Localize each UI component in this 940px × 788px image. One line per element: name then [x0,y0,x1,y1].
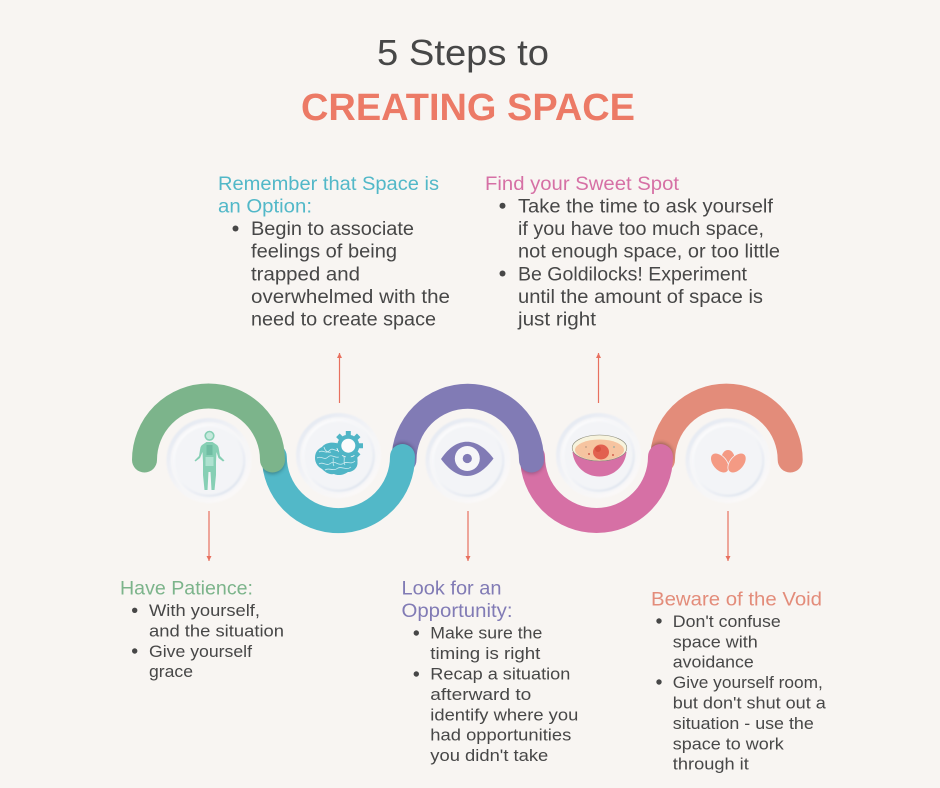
step 4 plate with soup bowl icon [556,413,641,498]
step 5 plate with lotus icon [686,418,770,503]
text block: Beware of the Void: Give yourself room, [673,673,823,692]
text block: Look for an Opportunity: Look for an [402,578,502,599]
text block: Beware of the Void: through it [673,755,749,774]
text block: Have Patience: Give yourself [149,642,252,661]
step 1 plate with body icon [166,418,252,503]
icon: lotus [707,450,750,476]
text block: Find your Sweet Spot: Find your Sweet Spot [485,174,680,195]
text block: Find your Sweet Spot: just right [517,310,597,331]
icon: soup bowl [572,435,627,476]
text block: Have Patience: and the situation [149,622,284,641]
text block: Beware of the Void: space to work [673,734,784,753]
arrow: down to Have Patience [208,511,210,561]
text block: Beware of the Void: situation - use the [673,714,814,733]
text block: Beware of the Void: Beware of the Void [651,589,822,610]
band: pink arc [532,442,673,520]
text block: Find your Sweet Spot: not enough space, or too little [518,242,780,263]
band: salmon arc [662,396,790,460]
wave timeline [144,396,790,521]
text block: Beware of the Void: avoidance [673,653,754,672]
arrow: down to Look for an Opportunity [467,511,469,561]
text block: Remember that Space is an Option: overwhelmed with the [251,287,450,308]
text block: Have Patience [120,578,284,681]
text block: Have Patience: Have Patience: [120,578,253,599]
band: purple arc [404,396,544,474]
text block: Remember that Space is an Option: Remember that Space is [218,174,439,195]
text block: Look for an Opportunity: timing is right [430,644,541,663]
icon: human body [194,432,224,490]
title [301,32,635,129]
text block: Have Patience: grace [149,662,193,681]
text block: Remember that Space is an Option: Begin to associate [251,219,414,240]
text block: Remember that Space is an Option: feelings of being [251,242,397,263]
step 3 plate with eye icon [426,418,510,503]
text block: Find your Sweet Spot: until the amount of space is [518,287,763,308]
text block: Remember that Space is an Option: trapped and [251,264,360,285]
text block: Remember that Space is an Option: need to create space [251,310,436,331]
text block: Have Patience: With yourself, [149,601,260,620]
band: green arc [144,396,285,474]
text block: Remember that Space is an Option [218,174,450,331]
icon: eye [441,442,494,476]
text block: Remember that Space is an Option: an Option: [218,196,312,218]
text block: Look for an Opportunity: afterward to [430,685,531,704]
text block: Find your Sweet Spot: if you have too much space, [518,219,764,240]
arrow: up to Remember that Space [338,353,340,403]
text block: Beware of the Void: space with [673,632,758,651]
title: 5 Steps to [377,32,549,73]
text block: Look for an Opportunity [402,578,578,765]
text block: Beware of the Void [651,589,826,774]
icon: brain and gear [315,431,363,475]
text block: Find your Sweet Spot [485,174,780,331]
text block: Look for an Opportunity: Make sure the [430,624,542,643]
band: teal arc [274,442,415,521]
arrow: up to Find your Sweet Spot [598,353,600,403]
step 2 plate with brain icon [296,413,381,498]
text block: Look for an Opportunity: you didn't take [430,746,548,765]
arrow: down to Beware of the Void [727,511,729,561]
title: CREATING SPACE [301,87,635,129]
text block: Find your Sweet Spot: Be Goldilocks! Experiment [518,264,748,285]
text block: Look for an Opportunity: Opportunity: [402,601,512,622]
text block: Look for an Opportunity: identify where you [430,705,578,724]
text block: Look for an Opportunity: had opportunities [430,726,571,745]
text block: Beware of the Void: but don't shut out a [673,693,826,712]
text block: Look for an Opportunity: Recap a situation [430,665,570,684]
text block: Beware of the Void: Don't confuse [673,612,781,631]
text block: Find your Sweet Spot: Take the time to ask yourself [518,196,774,218]
